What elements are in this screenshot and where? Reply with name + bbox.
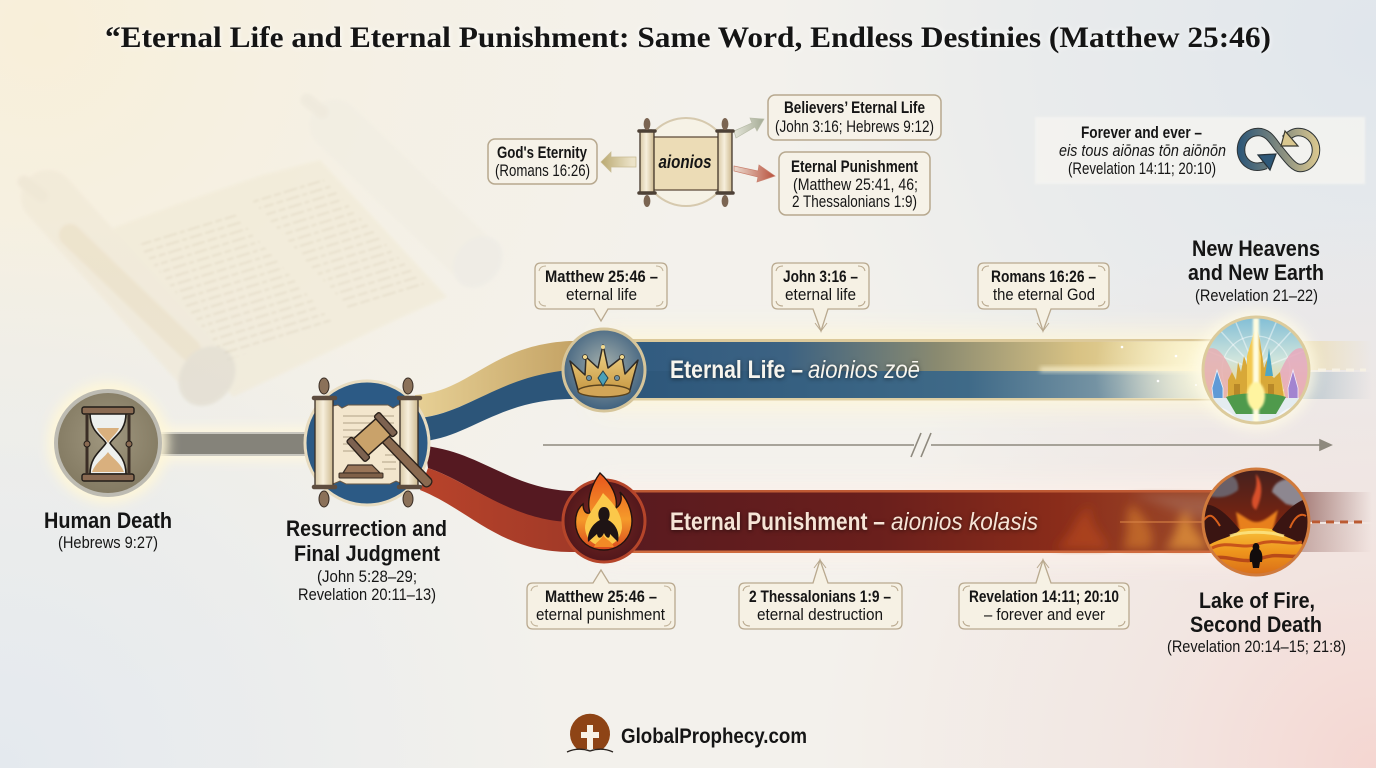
label: Eternal Punishment xyxy=(670,508,1038,536)
timeline arrow with break xyxy=(543,433,1331,457)
callout: Revelation 14:11 forever and ever xyxy=(959,560,1129,629)
label: New Heavens and New Earth xyxy=(1188,236,1324,305)
label: Eternal Life: Eternal Life – xyxy=(670,356,803,384)
label: Resurrection and Final Judgment: Revelation 20:11–13) xyxy=(298,585,436,604)
callout: Matthew 25:46 eternal life: Matthew 25:46 – xyxy=(545,267,658,286)
callout: Revelation 14:11 forever and ever: Revelation 14:11; 20:10 xyxy=(969,587,1119,606)
label: Eternal Punishment: aionios kolasis xyxy=(891,508,1038,536)
icon: cross and open book xyxy=(567,714,613,752)
life bar xyxy=(600,339,1230,400)
panel: forever and ever xyxy=(1035,117,1365,184)
icon: crown medallion xyxy=(563,329,645,411)
icon: hourglass xyxy=(56,391,160,495)
icon: heavenly city medallion xyxy=(1200,316,1312,426)
punishment bar fade to the right xyxy=(1300,492,1376,552)
label: Resurrection and Final Judgment: (John 5:28–29; xyxy=(317,567,417,586)
life bar fade to the right xyxy=(1300,341,1376,399)
label: Resurrection and Final Judgment: Resurrection and xyxy=(286,516,447,541)
callout: Romans 16:26 the eternal God: Romans 16:26 – xyxy=(991,267,1096,286)
box: Eternal Punishment: Eternal Punishment xyxy=(791,157,918,176)
callout: John 3:16 eternal life xyxy=(772,263,869,331)
callout: Matthew 25:46 eternal life xyxy=(535,263,667,321)
arrow to Eternal Punishment xyxy=(734,165,775,182)
node: human death xyxy=(44,383,172,552)
dark and red curved ribbon xyxy=(420,446,610,552)
icon: lake of fire medallion xyxy=(1200,468,1312,576)
faded ancient scroll background image xyxy=(24,100,513,417)
label: Eternal Punishment: Eternal Punishment – xyxy=(670,508,885,536)
box: Eternal Punishment: 2 Thessalonians 1:9) xyxy=(792,192,917,211)
box: God's Eternity: (Romans 16:26) xyxy=(495,161,590,180)
callout: John 3:16 eternal life: John 3:16 – xyxy=(783,267,858,286)
callout: 2 Thessalonians 1:9 eternal destruction: eternal destruction xyxy=(757,605,883,624)
punishment bar xyxy=(600,490,1220,553)
aionios scroll: aionios xyxy=(658,152,712,172)
callout: Matthew 25:46 eternal punishment xyxy=(527,570,675,629)
callout: Matthew 25:46 eternal life: eternal life xyxy=(566,285,637,304)
title: “Eternal Life and Eternal Punishment: Same Word, Endless Destinies (Matthew 25:46) xyxy=(105,21,1271,54)
life path ribbon xyxy=(415,332,1376,441)
box: God's Eternity: God's Eternity xyxy=(497,143,587,162)
arrow to God's Eternity xyxy=(601,152,636,172)
label: New Heavens and New Earth: New Heavens xyxy=(1192,236,1320,261)
punishment path ribbon xyxy=(420,446,1376,560)
logo: GlobalProphecy.com: GlobalProphecy.com xyxy=(621,725,807,748)
box: Eternal Punishment: (Matthew 25:41, 46; xyxy=(793,175,918,194)
callout: 2 Thessalonians 1:9 eternal destruction: 2 Thessalonians 1:9 – xyxy=(749,587,891,606)
icon: flame medallion xyxy=(563,473,645,562)
icon: scroll and gavel xyxy=(305,378,432,507)
label: Human Death: Human Death xyxy=(44,508,172,533)
label: Human Death xyxy=(44,508,172,552)
panel: forever and ever: eis tous aiōnas tōn aiōnōn xyxy=(1059,141,1226,160)
callout: Matthew 25:46 eternal punishment: eternal punishment xyxy=(536,605,665,624)
box: Believers' Eternal Life: Believers’ Eternal Life xyxy=(784,98,925,117)
callout: Romans 16:26 the eternal God xyxy=(978,263,1109,331)
destination: lake of fire xyxy=(1167,468,1346,656)
label: Resurrection and Final Judgment: Final Judgment xyxy=(294,541,441,566)
scroll writing xyxy=(143,182,417,352)
box: Believers' Eternal Life xyxy=(768,95,941,140)
aionios word diagram xyxy=(488,95,941,215)
panel: forever and ever: (Revelation 14:11; 20:10) xyxy=(1068,159,1216,178)
label: Eternal Life: aionios zoē xyxy=(808,356,920,384)
icon: infinity arrows xyxy=(1241,131,1316,170)
label: New Heavens and New Earth: and New Earth xyxy=(1188,260,1324,285)
callout: Revelation 14:11 forever and ever: – forever and ever xyxy=(984,605,1105,624)
callout: Romans 16:26 the eternal God: the eternal God xyxy=(993,285,1095,304)
arrow to Believers' Eternal Life xyxy=(734,118,764,138)
logo: GlobalProphecy.com xyxy=(567,714,807,752)
label: Human Death: (Hebrews 9:27) xyxy=(58,533,158,552)
aionios scroll xyxy=(639,118,733,207)
label: Resurrection and Final Judgment xyxy=(286,516,447,604)
label: Lake of Fire, Second Death: Lake of Fire, xyxy=(1199,588,1315,613)
callout: Matthew 25:46 eternal punishment: Matthew 25:46 – xyxy=(545,587,657,606)
label: Lake of Fire, Second Death: (Revelation 20:14–15; 21:8) xyxy=(1167,637,1346,656)
label: Lake of Fire, Second Death: Second Death xyxy=(1190,612,1322,637)
box: Eternal Punishment xyxy=(779,152,930,215)
box: God's Eternity xyxy=(488,139,597,184)
destination: new heavens and new earth xyxy=(1188,236,1324,430)
panel: forever and ever: Forever and ever – xyxy=(1081,123,1202,142)
label: New Heavens and New Earth: (Revelation 21–22) xyxy=(1195,286,1318,305)
callout: John 3:16 eternal life: eternal life xyxy=(785,285,856,304)
connector: death to judgment xyxy=(155,428,315,460)
label: Lake of Fire, Second Death xyxy=(1167,588,1346,656)
box: Believers' Eternal Life: (John 3:16; Hebrews 9:12) xyxy=(775,117,934,136)
callout: 2 Thessalonians 1:9 eternal destruction xyxy=(739,560,902,629)
gold and blue curved ribbon xyxy=(415,341,610,441)
node: resurrection and final judgment xyxy=(286,378,447,604)
label: Eternal Life xyxy=(670,356,920,384)
